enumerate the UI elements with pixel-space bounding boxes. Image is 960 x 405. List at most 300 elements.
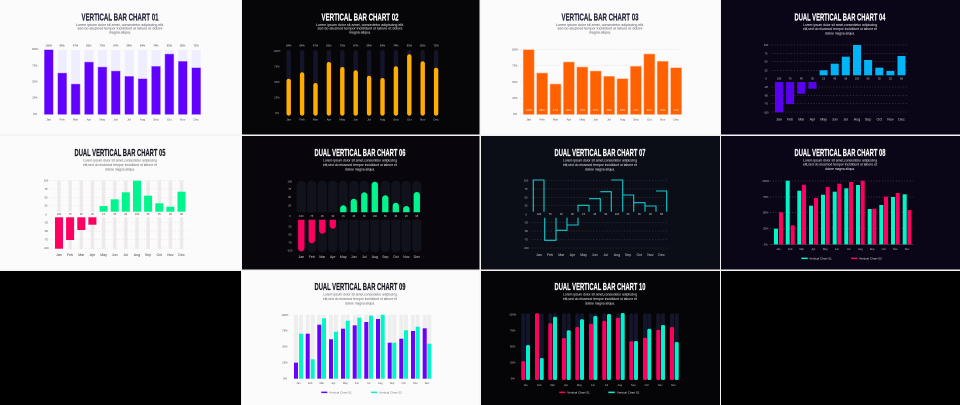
value labels: 59% bbox=[606, 108, 612, 112]
month labels: Nov bbox=[413, 381, 418, 385]
month labels: Oct bbox=[882, 247, 886, 251]
month labels: Nov bbox=[647, 253, 654, 257]
month labels bbox=[526, 118, 679, 122]
value labels: 66 bbox=[363, 214, 366, 218]
month labels: Oct bbox=[407, 118, 412, 122]
value labels: 30 bbox=[331, 214, 335, 218]
value labels bbox=[525, 108, 679, 112]
y axis labels: 75 bbox=[764, 51, 768, 55]
subtitle: elit,sed do eiusmod tempor incididunt ut labore et bbox=[323, 297, 397, 301]
month labels: Apr bbox=[811, 247, 816, 251]
subtitle: dolore magna aliqua. bbox=[345, 301, 375, 305]
value labels: 35 bbox=[638, 212, 641, 216]
subtitle: elit,sed do eiusmod tempor incididunt ut labore et bbox=[563, 163, 637, 167]
month labels: Jul bbox=[367, 381, 371, 385]
bars bbox=[44, 50, 201, 115]
value labels bbox=[537, 212, 663, 216]
month labels: Nov bbox=[893, 247, 898, 251]
y axis labels: 100 bbox=[287, 179, 292, 183]
value labels: 25 bbox=[169, 212, 172, 216]
value labels: 56 bbox=[867, 77, 870, 81]
month labels: May bbox=[823, 247, 828, 251]
y axis labels: 100% bbox=[282, 313, 289, 317]
month labels: Feb bbox=[537, 383, 542, 387]
y axis labels bbox=[509, 313, 517, 380]
month labels: May bbox=[339, 118, 346, 122]
month labels: Jun bbox=[592, 253, 598, 257]
month labels: Nov bbox=[403, 255, 410, 259]
month labels: Mar bbox=[558, 253, 565, 257]
y axis labels bbox=[287, 179, 293, 252]
title: DUAL VERTICAL BAR CHART 06 bbox=[314, 147, 406, 159]
month labels: Jan bbox=[776, 118, 782, 122]
y axis labels bbox=[523, 178, 529, 250]
value labels: 74% bbox=[633, 108, 639, 112]
subtitle: Lorem ipsum dolor sit amet,consectetur adipiscing bbox=[83, 159, 157, 163]
background tracks bbox=[44, 50, 201, 114]
subtitle: Lorem ipsum dolor sit amet, consectetur adipiscing elit, bbox=[316, 23, 404, 27]
month labels: Nov bbox=[180, 118, 186, 122]
y axis labels: 25% bbox=[282, 361, 288, 365]
month labels bbox=[296, 381, 430, 385]
month labels: Aug bbox=[614, 253, 620, 257]
value labels: 73% bbox=[100, 44, 106, 48]
month labels: Feb bbox=[309, 255, 315, 259]
value labels: 100 bbox=[373, 214, 378, 218]
subtitle: dolore magna aliqua. bbox=[825, 167, 855, 171]
month labels: Feb bbox=[540, 118, 545, 122]
subtitle: Lorem ipsum dolor sit amet,consectetur adipiscing bbox=[323, 159, 397, 163]
subtitle: magna aliqua. bbox=[589, 31, 611, 35]
value labels: 25 bbox=[405, 214, 408, 218]
y axis labels: 75 bbox=[44, 187, 48, 191]
outlined step bars bbox=[533, 180, 667, 240]
month labels: Mar bbox=[553, 118, 558, 122]
value labels: 47% bbox=[313, 43, 319, 47]
month labels: May bbox=[820, 118, 827, 122]
subtitle: Lorem ipsum dolor sit amet, consectetur adipiscing elit, bbox=[76, 23, 164, 27]
value labels: 68 bbox=[415, 214, 419, 218]
value labels: 68 bbox=[660, 212, 663, 216]
month labels: Apr bbox=[87, 118, 91, 122]
y axis labels: 0 bbox=[765, 77, 767, 81]
series 1 bars bbox=[774, 181, 907, 244]
negative bars bbox=[775, 82, 816, 112]
title: DUAL VERTICAL BAR CHART 05 bbox=[74, 147, 166, 159]
value labels: 35 bbox=[878, 77, 881, 81]
subtitle bbox=[76, 23, 164, 35]
value labels: 68 bbox=[900, 77, 903, 81]
value labels: 54% bbox=[380, 43, 386, 47]
y axis labels: 50 bbox=[764, 60, 768, 64]
y axis labels: 75% bbox=[512, 64, 518, 68]
month labels: Feb bbox=[60, 118, 65, 122]
panel: dual vertical bar chart 05 bbox=[0, 136, 241, 270]
y axis labels: -50 bbox=[44, 229, 48, 233]
month labels: Apr bbox=[564, 383, 568, 387]
y axis labels: 100 bbox=[764, 43, 769, 47]
month labels: Jan bbox=[286, 118, 291, 122]
value labels: 67% bbox=[593, 108, 599, 112]
month labels: Jul bbox=[127, 118, 131, 122]
month labels: Jan bbox=[526, 118, 531, 122]
value labels: 45 bbox=[321, 214, 324, 218]
bars bbox=[286, 54, 438, 116]
legend: Vertical Chart 02 bbox=[859, 256, 882, 260]
value labels: 100 bbox=[57, 212, 62, 216]
value labels: 35 bbox=[394, 214, 398, 218]
value labels: 75 bbox=[789, 77, 792, 81]
month labels: Dec bbox=[671, 383, 677, 387]
y axis labels: 50 bbox=[524, 195, 528, 199]
background tracks bbox=[286, 50, 438, 116]
month labels: Jul bbox=[843, 118, 848, 122]
month labels: Nov bbox=[658, 383, 663, 387]
subtitle: magna aliqua. bbox=[109, 31, 131, 35]
y axis labels: 75 bbox=[288, 187, 292, 191]
value labels: 68 bbox=[180, 212, 183, 216]
y axis labels: -100 bbox=[43, 246, 49, 250]
value labels: 45 bbox=[560, 212, 563, 216]
month labels: Feb bbox=[300, 118, 305, 122]
background tracks bbox=[523, 315, 677, 378]
month labels: Apr bbox=[331, 381, 336, 385]
subtitle: dolore magna aliqua. bbox=[825, 31, 855, 35]
legend: Vertical Chart 02 bbox=[379, 390, 402, 394]
positive bars bbox=[340, 182, 420, 212]
value labels: 81% bbox=[86, 44, 92, 48]
month labels: Oct bbox=[402, 381, 406, 385]
y axis labels bbox=[512, 47, 519, 116]
value labels: 56 bbox=[147, 212, 150, 216]
value labels: 100% bbox=[525, 108, 533, 112]
legend: Vertical Chart 01 bbox=[567, 390, 590, 394]
subtitle: Lorem ipsum dolor sit amet,consectetur adipiscing bbox=[563, 293, 637, 297]
panel: vertical bar chart 02 bbox=[242, 0, 480, 134]
legend: Vertical Chart 02 bbox=[617, 390, 640, 394]
month labels bbox=[56, 253, 185, 257]
month labels: Dec bbox=[178, 253, 185, 257]
month labels: Sep bbox=[631, 383, 636, 387]
subtitle: elit,sed do eiusmod tempor incididunt ut labore et bbox=[83, 163, 157, 167]
y axis labels: 0% bbox=[511, 376, 515, 380]
y axis labels: 75% bbox=[274, 65, 280, 69]
value labels: 100 bbox=[855, 77, 860, 81]
value labels: 100% bbox=[45, 44, 53, 48]
month labels: Dec bbox=[193, 118, 199, 122]
y axis labels: 75% bbox=[763, 195, 769, 199]
value labels: 72% bbox=[433, 43, 439, 47]
y axis labels: 25% bbox=[510, 361, 516, 365]
month labels: Nov bbox=[660, 118, 666, 122]
month labels: Jun bbox=[351, 255, 357, 259]
y axis labels: 25% bbox=[32, 96, 38, 100]
y axis labels: 25 bbox=[524, 204, 528, 208]
value labels: 15 bbox=[582, 212, 586, 216]
value labels: 30 bbox=[571, 212, 574, 216]
value labels: 75 bbox=[69, 212, 72, 216]
month labels: Jul bbox=[847, 247, 851, 251]
value labels: 82% bbox=[420, 43, 426, 47]
value labels: 65% bbox=[59, 44, 65, 48]
month labels: Apr bbox=[810, 118, 816, 122]
y axis labels: -75 bbox=[764, 102, 768, 106]
month labels: Apr bbox=[330, 255, 336, 259]
month labels: Apr bbox=[570, 253, 576, 257]
subtitle: sed do eiusmod tempor incididunt ut labore et dolore bbox=[558, 27, 643, 31]
background tracks bbox=[59, 181, 182, 249]
y axis labels: 0 bbox=[45, 212, 47, 216]
month labels: Aug bbox=[617, 383, 623, 387]
month labels: Dec bbox=[433, 118, 439, 122]
month labels: Feb bbox=[67, 253, 73, 257]
value labels: 54% bbox=[286, 43, 292, 47]
value labels: 100 bbox=[135, 212, 140, 216]
value labels: 45 bbox=[593, 212, 597, 216]
month labels: Sep bbox=[633, 118, 639, 122]
month labels bbox=[776, 247, 910, 251]
y axis labels: 75 bbox=[524, 187, 528, 191]
month labels: Nov bbox=[167, 253, 174, 257]
month labels: Jan bbox=[524, 383, 528, 387]
month labels: Jan bbox=[776, 247, 781, 251]
background tracks bbox=[301, 185, 417, 248]
series 1 bars bbox=[521, 313, 674, 380]
y axis labels: -100 bbox=[287, 248, 293, 252]
month labels: Sep bbox=[145, 253, 151, 257]
negative bars bbox=[298, 220, 336, 251]
month labels: Apr bbox=[567, 118, 571, 122]
subtitle bbox=[563, 293, 637, 305]
month labels: Apr bbox=[327, 118, 331, 122]
series 2 bars bbox=[299, 315, 431, 379]
month labels: Dec bbox=[658, 253, 665, 257]
month labels: May bbox=[579, 118, 586, 122]
legend: Vertical Chart 01 bbox=[809, 256, 832, 260]
y axis labels: 25 bbox=[44, 204, 48, 208]
month labels: Sep bbox=[153, 118, 159, 122]
value labels: 82% bbox=[180, 44, 186, 48]
y axis labels: -100 bbox=[523, 246, 529, 250]
month labels: Dec bbox=[905, 247, 910, 251]
subtitle: dolore magna aliqua. bbox=[345, 167, 375, 171]
y axis labels: 0% bbox=[33, 112, 38, 116]
value labels: 100 bbox=[299, 214, 304, 218]
legend bbox=[321, 390, 402, 394]
title: VERTICAL BAR CHART 01 bbox=[82, 12, 159, 24]
panel: dual vertical bar chart 06 bbox=[242, 136, 480, 270]
y axis labels: 75% bbox=[32, 63, 38, 67]
y axis labels: 25 bbox=[288, 203, 292, 207]
legend: Vertical Chart 01 bbox=[329, 390, 352, 394]
value labels: 81% bbox=[326, 43, 332, 47]
series 1 bars bbox=[294, 319, 427, 379]
month labels: Aug bbox=[854, 118, 860, 122]
value labels: 74% bbox=[153, 44, 159, 48]
month labels: Mar bbox=[319, 255, 326, 259]
y axis labels: 25% bbox=[274, 96, 280, 100]
month labels: Aug bbox=[858, 247, 863, 251]
month labels: Jun bbox=[593, 118, 598, 122]
value labels: 75 bbox=[549, 212, 552, 216]
subtitle: dolore magna aliqua. bbox=[105, 167, 135, 171]
value labels: 56 bbox=[384, 214, 387, 218]
y axis labels: 100% bbox=[509, 313, 517, 317]
month labels: Jun bbox=[355, 381, 360, 385]
value labels: 74% bbox=[393, 43, 399, 47]
subtitle: Lorem ipsum dolor sit amet,consectetur adipiscing bbox=[563, 159, 637, 163]
month labels: Jan bbox=[536, 253, 542, 257]
value labels: 47% bbox=[553, 108, 559, 112]
subtitle: sed do eiusmod tempor incididunt ut labore et dolore bbox=[78, 27, 163, 31]
y axis labels: 0 bbox=[289, 214, 291, 218]
month labels: Sep bbox=[382, 255, 389, 259]
month labels: Mar bbox=[319, 381, 324, 385]
value labels: 30 bbox=[91, 212, 94, 216]
subtitle bbox=[316, 23, 404, 35]
y axis labels: 25% bbox=[512, 96, 518, 100]
value labels: 100 bbox=[777, 77, 782, 81]
month labels: Jul bbox=[362, 255, 367, 259]
month labels: Jul bbox=[607, 118, 611, 122]
subtitle: magna aliqua. bbox=[349, 31, 371, 35]
subtitle: elit,sed do eiusmod tempor incididunt ut labore et bbox=[563, 297, 637, 301]
background tracks bbox=[296, 315, 429, 379]
month labels: Oct bbox=[157, 253, 162, 257]
subtitle bbox=[563, 159, 637, 171]
y axis labels: -25 bbox=[288, 224, 292, 228]
month labels bbox=[46, 118, 199, 122]
title: DUAL VERTICAL BAR CHART 08 bbox=[794, 147, 886, 159]
month labels: Feb bbox=[308, 381, 313, 385]
subtitle bbox=[83, 159, 157, 171]
y axis labels: -25 bbox=[764, 85, 768, 89]
month labels: Oct bbox=[647, 118, 652, 122]
value labels: 82% bbox=[660, 108, 666, 112]
panel: dual vertical bar chart 09 bbox=[242, 271, 480, 405]
value labels: 15 bbox=[102, 212, 106, 216]
panel: blank bottom-left bbox=[0, 271, 241, 405]
month labels: Jul bbox=[367, 118, 371, 122]
month labels: Jan bbox=[46, 118, 51, 122]
title: DUAL VERTICAL BAR CHART 04 bbox=[794, 12, 886, 24]
value labels: 73% bbox=[340, 43, 346, 47]
value labels bbox=[299, 214, 419, 218]
subtitle: Lorem ipsum dolor sit amet,consectetur adipiscing bbox=[803, 158, 877, 162]
month labels: Jun bbox=[832, 118, 838, 122]
y axis labels bbox=[32, 47, 39, 116]
y axis labels bbox=[43, 178, 49, 250]
month labels: Oct bbox=[167, 118, 172, 122]
y axis labels: -25 bbox=[44, 221, 48, 225]
value labels: 54% bbox=[140, 44, 146, 48]
y axis labels: 50% bbox=[512, 80, 518, 84]
month labels: Sep bbox=[865, 118, 871, 122]
y axis labels: 0% bbox=[513, 112, 518, 116]
subtitle: elit,sed do eiusmod tempor incididunt ut labore et bbox=[803, 163, 877, 167]
y axis labels: -75 bbox=[524, 238, 528, 242]
month labels: May bbox=[100, 253, 107, 257]
value labels: 67% bbox=[353, 43, 359, 47]
subtitle bbox=[323, 159, 397, 171]
value labels: 45 bbox=[113, 212, 117, 216]
value labels: 59% bbox=[366, 43, 372, 47]
title: DUAL VERTICAL BAR CHART 10 bbox=[554, 281, 646, 293]
month labels: Mar bbox=[798, 118, 805, 122]
month labels: Jul bbox=[123, 253, 128, 257]
y axis labels bbox=[282, 313, 289, 380]
month labels: May bbox=[343, 381, 348, 385]
month labels: Feb bbox=[788, 247, 793, 251]
subtitle: Lorem ipsum dolor sit amet,consectetur adipiscing bbox=[323, 293, 397, 297]
panel: vertical bar chart 03 bbox=[481, 0, 720, 134]
y axis labels: 0 bbox=[525, 212, 527, 216]
month labels: Dec bbox=[673, 118, 679, 122]
value labels bbox=[286, 43, 439, 47]
title: DUAL VERTICAL BAR CHART 07 bbox=[554, 147, 646, 159]
title: DUAL VERTICAL BAR CHART 09 bbox=[314, 281, 406, 293]
month labels: Oct bbox=[645, 383, 649, 387]
y axis labels: -25 bbox=[524, 221, 528, 225]
y axis labels: 50% bbox=[282, 345, 288, 349]
y axis labels: 50% bbox=[274, 80, 280, 84]
value labels: 100 bbox=[537, 212, 542, 216]
month labels: May bbox=[577, 383, 583, 387]
value labels: 35 bbox=[158, 212, 161, 216]
subtitle bbox=[803, 158, 877, 171]
month labels: Aug bbox=[140, 118, 145, 122]
y axis labels: 0% bbox=[283, 376, 288, 380]
y axis labels bbox=[763, 43, 769, 114]
y axis labels: 50% bbox=[32, 79, 38, 83]
subtitle: Lorem ipsum dolor sit amet, consectetur adipiscing elit, bbox=[556, 23, 644, 27]
panel: dual vertical bar chart 10 bbox=[481, 271, 720, 405]
y axis labels: -50 bbox=[764, 93, 768, 97]
y axis labels: -50 bbox=[288, 232, 292, 236]
month labels: Mar bbox=[313, 118, 318, 122]
y axis labels bbox=[762, 179, 770, 247]
month labels: Aug bbox=[378, 381, 383, 385]
month labels bbox=[298, 255, 420, 259]
value labels: 75 bbox=[310, 214, 314, 218]
month labels: Aug bbox=[380, 118, 385, 122]
value labels: 15 bbox=[822, 77, 826, 81]
value labels: 54% bbox=[620, 108, 626, 112]
month labels bbox=[776, 118, 905, 122]
panel: dual vertical bar chart 07 bbox=[481, 136, 720, 270]
month labels: Oct bbox=[877, 118, 882, 122]
subtitle: Lorem ipsum dolor sit amet,consectetur adipiscing bbox=[803, 23, 877, 27]
value labels: 56 bbox=[627, 212, 630, 216]
value labels: 65% bbox=[539, 108, 545, 112]
value labels: 25 bbox=[649, 212, 652, 216]
month labels: Nov bbox=[887, 118, 894, 122]
month labels: Jun bbox=[835, 247, 840, 251]
panel: vertical bar chart 01 bbox=[0, 0, 241, 134]
month labels: Mar bbox=[73, 118, 78, 122]
subtitle: dolore magna aliqua. bbox=[585, 167, 615, 171]
month labels: Dec bbox=[425, 381, 430, 385]
month labels: Nov bbox=[420, 118, 426, 122]
y axis labels: 50 bbox=[288, 195, 292, 199]
month labels: Jul bbox=[603, 253, 608, 257]
value labels: 72% bbox=[673, 108, 679, 112]
y axis labels: 100 bbox=[524, 178, 529, 182]
value labels: 45 bbox=[800, 77, 803, 81]
value labels: 100 bbox=[615, 212, 620, 216]
value labels bbox=[777, 77, 903, 81]
month labels bbox=[524, 383, 677, 387]
